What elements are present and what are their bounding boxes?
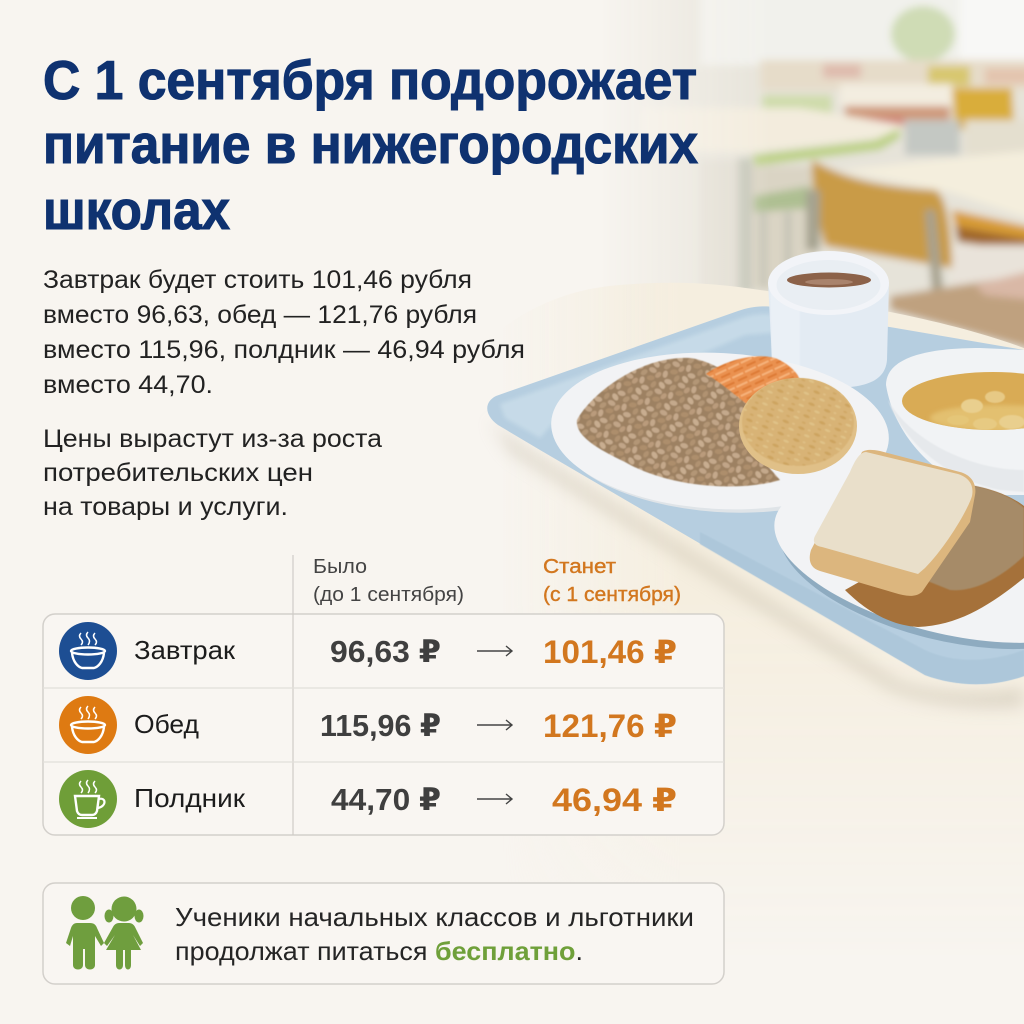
new price: breakfast: 101,46 ₽ [543,634,677,670]
tray rim highlight [500,314,785,438]
column header: before: Было [313,555,367,578]
small plate shadow [763,457,1024,679]
intro text: new prices: вместо 44,70. [43,371,213,399]
column header: after: (с 1 сентября) [543,583,681,606]
arrow [477,646,512,656]
callout text: Ученики начальных классов и льготники [175,902,694,932]
new price: lunch: 121,76 ₽ [543,708,677,744]
title: школах [43,179,230,241]
old price: snack: 44,70 ₽ [331,782,441,817]
icon: soup bowl [59,622,117,680]
bowl body [886,348,1024,495]
new price: snack: 46,94 ₽ [552,782,677,818]
buckwheat [577,358,780,486]
soup beans [930,391,1024,431]
callout text [175,902,694,966]
tray front edge [700,532,1024,684]
callout text: продолжат питаться бесплатно. [175,936,583,966]
intro text: reason: Цены вырастут из-за роста [43,425,382,453]
column header: before [313,555,464,606]
column header: before: (до 1 сентября) [313,583,464,606]
icon: cup [59,770,117,828]
column header: after: Станет [543,555,617,578]
icon: soup bowl [59,696,117,754]
photo: food tray [487,251,1024,707]
column header: after [543,555,681,606]
carrot salad [706,356,800,405]
arrow [477,720,512,730]
intro text: reason [43,425,382,521]
tray [487,306,1024,684]
photo: blurred school canteen [660,0,1024,348]
callout panel [43,883,724,984]
intro text: reason: на товары и услуги. [43,493,288,521]
label: lunch: Обед [134,709,199,739]
old price: breakfast: 96,63 ₽ [330,634,441,669]
icon: children [66,896,144,970]
table panel [43,614,724,835]
cup body [768,282,889,388]
bread plate [758,449,1024,679]
intro text: new prices: вместо 96,63, обед — 121,76 рубля [43,301,477,329]
price table [43,555,724,835]
label: snack: Полдник [134,783,246,813]
label: breakfast: Завтрак [134,635,236,665]
intro text: new prices [43,266,525,399]
title: питание в нижегородских [43,113,698,175]
soup bowl [886,348,1024,495]
intro text: new prices: Завтрак будет стоить 101,46 рубля [43,266,472,294]
white bread slice [810,450,975,596]
row: breakfast [59,622,677,680]
old price: lunch: 115,96 ₽ [320,708,441,743]
plate rim [547,344,893,518]
intro text: reason: потребительских цен [43,459,313,487]
callout: free meals [43,883,724,984]
soup [902,372,1024,430]
tray shadow [490,420,1024,707]
table surface [578,283,1024,786]
cup coffee [787,272,871,288]
main plate [547,344,893,523]
intro text: new prices: вместо 115,96, полдник — 46,94 рубля [43,336,525,364]
fish cake [739,378,857,474]
title [43,49,698,241]
arrow [477,794,512,804]
brown bread slice [845,484,1024,627]
row: lunch [59,696,677,754]
small plate [758,449,1024,673]
row: snack [59,770,677,828]
cup rim [768,251,889,315]
cup [768,251,889,388]
title: С 1 сентября подорожает [43,49,697,111]
plate underside [553,359,887,523]
